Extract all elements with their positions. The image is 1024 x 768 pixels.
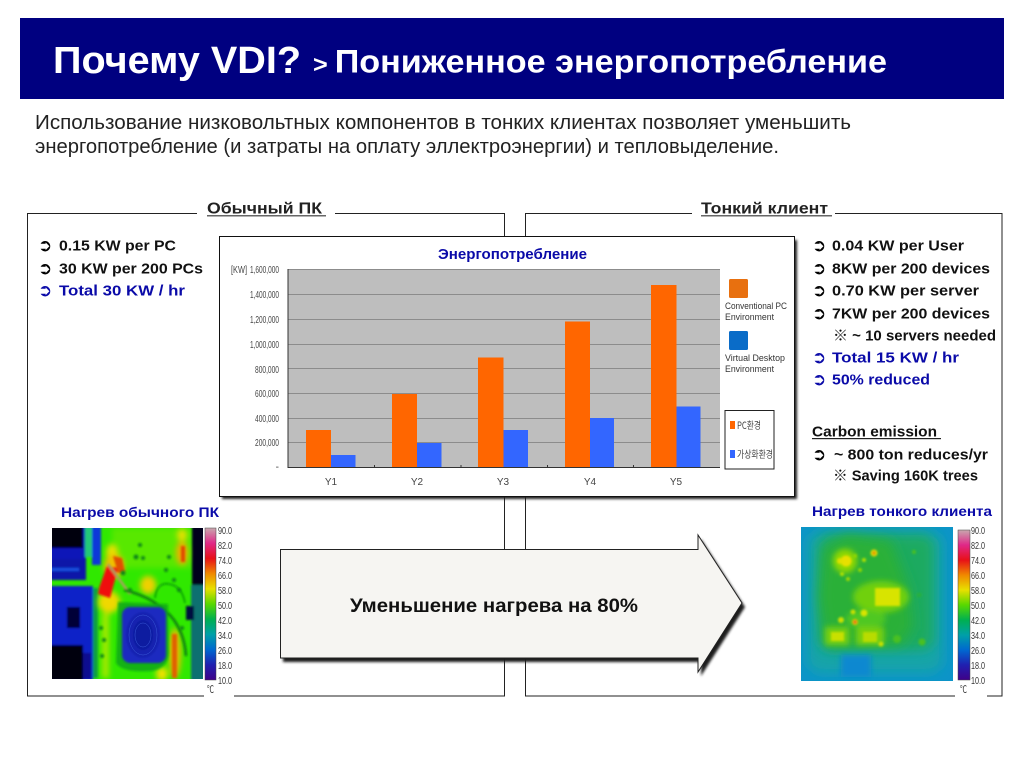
x axis labels: Y2	[411, 477, 424, 488]
series legend box	[725, 410, 774, 469]
conventional PC power list: ➲	[38, 259, 52, 279]
thin client power list: Total 15 KW / hr	[832, 350, 959, 366]
color scale: thin client: 34.0	[971, 631, 985, 642]
thin client power list: ➲	[812, 259, 826, 279]
intro text: Использование низковольтных компонентов в тонких клиентах позволяет уменьшить	[35, 112, 851, 134]
color scale: conventional PC	[204, 526, 234, 697]
color scale: conventional PC: 74.0	[218, 556, 232, 567]
color scale: conventional PC: 90.0	[218, 526, 232, 537]
y axis labels: 600,000	[255, 389, 279, 400]
conventional PC power list: ➲	[38, 281, 52, 301]
y axis labels: 1,200,000	[250, 315, 279, 326]
thin client power list: ➲	[812, 281, 826, 301]
legend: virtual desktop	[725, 331, 785, 374]
x axis labels: Y5	[670, 477, 683, 488]
color scale: thin client: 74.0	[971, 556, 985, 567]
panel heading: conventional PC: Обычный ПК	[207, 200, 323, 218]
color scale: thin client: 82.0	[971, 541, 985, 552]
carbon emission notes: ➲	[812, 445, 826, 465]
conventional PC power list: 30 KW per 200 PCs	[59, 262, 203, 278]
conventional PC power list	[38, 236, 203, 301]
bars	[306, 285, 676, 467]
heat label: conventional PC: Нагрев обычного ПК	[61, 505, 220, 520]
panel: thin client	[526, 200, 1002, 696]
heat label: thin client: Нагрев тонкого клиента	[812, 504, 992, 519]
y axis labels: 1,600,000	[250, 265, 279, 276]
color scale: conventional PC: 50.0	[218, 601, 232, 612]
color scale: conventional PC: 58.0	[218, 586, 232, 597]
legend: conventional PC: Conventional PC	[725, 301, 787, 311]
legend: virtual desktop: Environment	[725, 364, 774, 374]
arrow label: Уменьшение нагрева на 80%	[350, 596, 638, 617]
color scale: thin client: 42.0	[971, 616, 985, 627]
chart title: Энергопотребление	[438, 247, 587, 263]
thin client power list: ➲	[812, 304, 826, 324]
thin client power list	[812, 236, 996, 390]
heat map: conventional PC	[49, 525, 206, 682]
color scale: conventional PC: 82.0	[218, 541, 232, 552]
panel: conventional PC	[28, 200, 504, 696]
title bar	[20, 18, 1004, 99]
series legend box: 가상화환경	[737, 446, 773, 461]
color scale: thin client: 18.0	[971, 661, 985, 672]
color scale: thin client: 58.0	[971, 586, 985, 597]
y axis labels: 400,000	[255, 414, 279, 425]
x axis labels: Y3	[497, 477, 510, 488]
color scale: thin client: 26.0	[971, 646, 985, 657]
series legend box: PC환경	[737, 417, 761, 432]
x axis labels: Y1	[325, 477, 338, 488]
color scale: conventional PC: 66.0	[218, 571, 232, 582]
conventional PC power list: ➲	[38, 236, 52, 256]
y axis labels: 200,000	[255, 438, 279, 449]
y axis labels: -	[276, 462, 279, 473]
color scale: conventional PC: ℃	[207, 685, 214, 696]
color scale: thin client: 10.0	[971, 676, 985, 687]
intro text	[35, 112, 851, 158]
color scale: conventional PC: 34.0	[218, 631, 232, 642]
legend: conventional PC	[725, 279, 787, 322]
carbon emission notes: Carbon emission	[812, 424, 937, 440]
y axis labels: 800,000	[255, 365, 279, 376]
conventional PC power list: 0.15 KW per PC	[59, 238, 176, 254]
subtitle: > Пониженное энергопотребление	[313, 44, 887, 80]
color scale: thin client: 66.0	[971, 571, 985, 582]
y axis labels: 1,400,000	[250, 290, 279, 301]
carbon emission notes: ※ Saving 160K trees	[833, 468, 978, 484]
color scale: thin client	[955, 526, 987, 697]
color scale: thin client: 90.0	[971, 526, 985, 537]
conventional PC power list: Total 30 KW / hr	[59, 284, 185, 300]
legend: conventional PC: Environment	[725, 312, 774, 322]
title: Почему VDI?	[53, 40, 301, 82]
color scale: conventional PC: 10.0	[218, 676, 232, 687]
y axis labels: [KW]	[231, 265, 247, 276]
thin client power list: ➲	[812, 348, 826, 368]
panel heading: thin client: Тонкий клиент	[701, 200, 828, 218]
color scale: thin client: 50.0	[971, 601, 985, 612]
color scale: conventional PC: 26.0	[218, 646, 232, 657]
x axis labels: Y4	[584, 477, 597, 488]
thin client power list: 50% reduced	[832, 372, 930, 388]
bar chart	[231, 265, 720, 488]
thin client power list: 8KW per 200 devices	[832, 262, 990, 278]
color scale: conventional PC: 18.0	[218, 661, 232, 672]
chart panel	[220, 236, 797, 499]
legend: virtual desktop: Virtual Desktop	[725, 353, 785, 363]
thin client power list: ➲	[812, 370, 826, 390]
carbon emission notes	[812, 424, 988, 484]
thin client power list: ※ ~ 10 servers needed	[833, 328, 996, 344]
color scale: thin client: ℃	[960, 685, 967, 696]
y axis labels	[231, 265, 279, 473]
intro text: энергопотребление (и затраты на оплату эллектроэнергии) и тепловыделение.	[35, 136, 779, 158]
thin client power list: ➲	[812, 236, 826, 256]
fan	[122, 607, 166, 663]
x axis labels	[325, 477, 683, 488]
thin client power list: 0.70 KW per server	[832, 284, 979, 300]
thin client power list: 0.04 KW per User	[832, 238, 964, 254]
thin client power list: 7KW per 200 devices	[832, 306, 990, 322]
y axis labels: 1,000,000	[250, 340, 279, 351]
heat reduction arrow	[280, 535, 745, 676]
heat map: thin client	[801, 527, 953, 681]
carbon emission notes: ~ 800 ton reduces/yr	[834, 448, 988, 464]
color scale: conventional PC: 42.0	[218, 616, 232, 627]
